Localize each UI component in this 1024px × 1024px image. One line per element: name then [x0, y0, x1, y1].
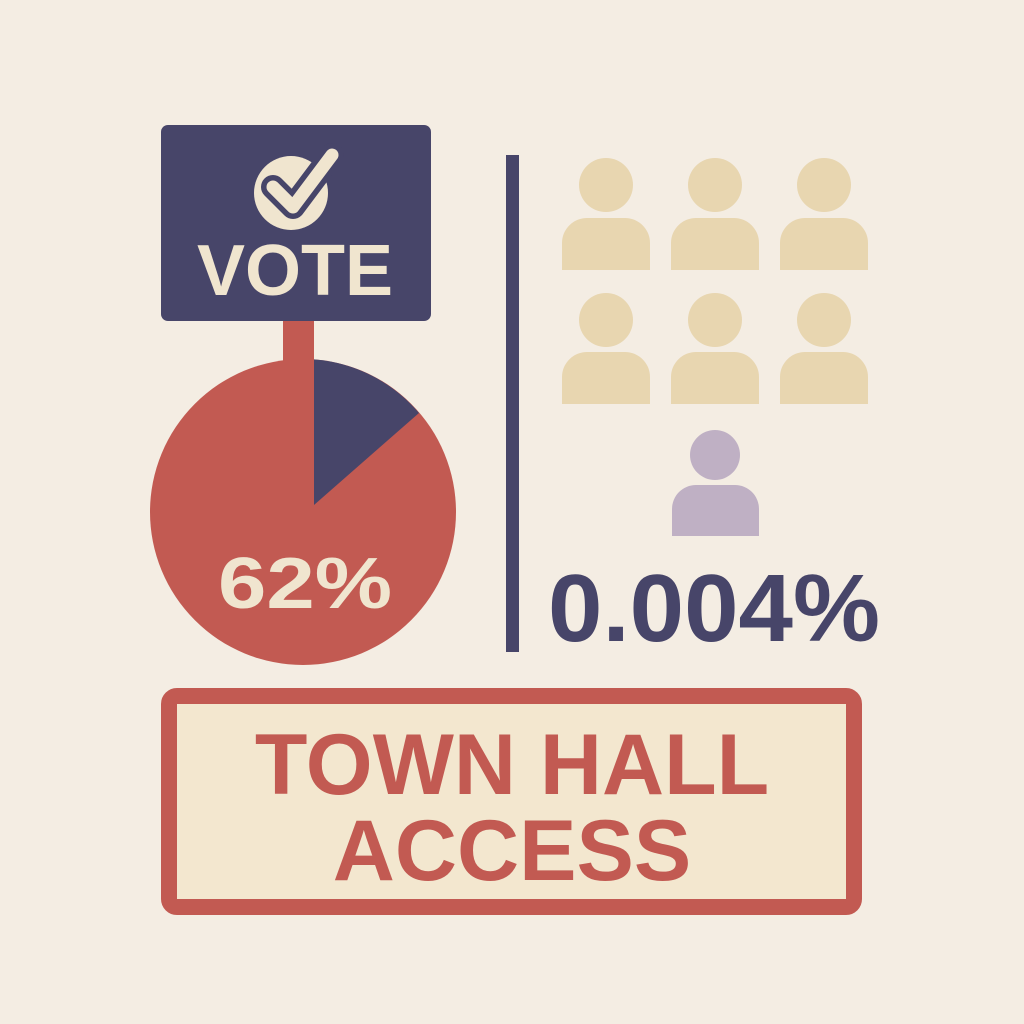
town hall banner [169, 696, 854, 907]
sign pole [283, 315, 314, 375]
divider line [506, 155, 519, 652]
town hall banner: ACCESS [333, 803, 691, 899]
sign board [161, 125, 431, 321]
pie label: 62% [218, 544, 392, 624]
banner text: TOWN HALL [255, 717, 769, 813]
percentage stat: 0.004% [548, 555, 880, 662]
icon: check circle [254, 155, 332, 230]
pie chart [150, 359, 456, 665]
icon: highlighted person [672, 430, 759, 536]
vote sign [161, 125, 431, 375]
people grid [562, 158, 868, 404]
sign text: VOTE [197, 231, 393, 311]
